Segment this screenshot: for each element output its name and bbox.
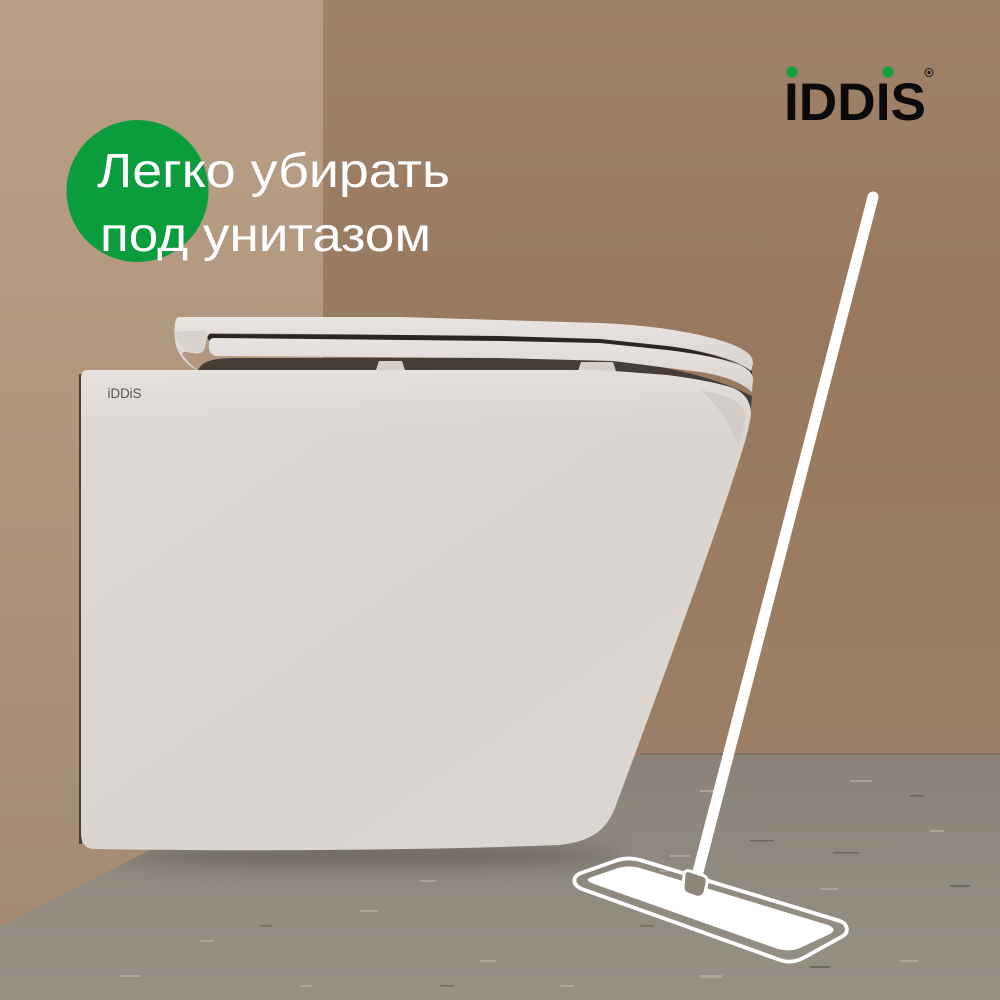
mop outer outline — [574, 858, 847, 962]
background: right wall — [322, 0, 1000, 760]
green circle — [66, 120, 208, 262]
lid hinge end — [175, 331, 207, 353]
toilet — [79, 317, 753, 850]
seat buffers — [376, 361, 616, 371]
mop handle — [698, 197, 873, 872]
icon: mop — [574, 197, 873, 962]
heading line 2: под унитазом — [100, 209, 431, 262]
dark gap between lid and seat — [205, 334, 752, 378]
dark gap under seat — [198, 358, 752, 420]
background: floor — [0, 753, 1000, 1000]
seat ring — [209, 338, 753, 392]
toilet seat: hinge and lid — [174, 317, 753, 420]
mop joint — [683, 871, 707, 897]
logo: IDDIS: IDDIS — [784, 73, 926, 132]
lid — [174, 317, 753, 371]
toilet shadow on floor — [120, 845, 620, 867]
mop pad — [588, 866, 834, 950]
toilet bowl — [81, 370, 751, 850]
background: left wall — [0, 0, 323, 930]
heading: Легко убирать — [97, 145, 450, 198]
small toilet logo: iDDiS — [108, 385, 142, 401]
